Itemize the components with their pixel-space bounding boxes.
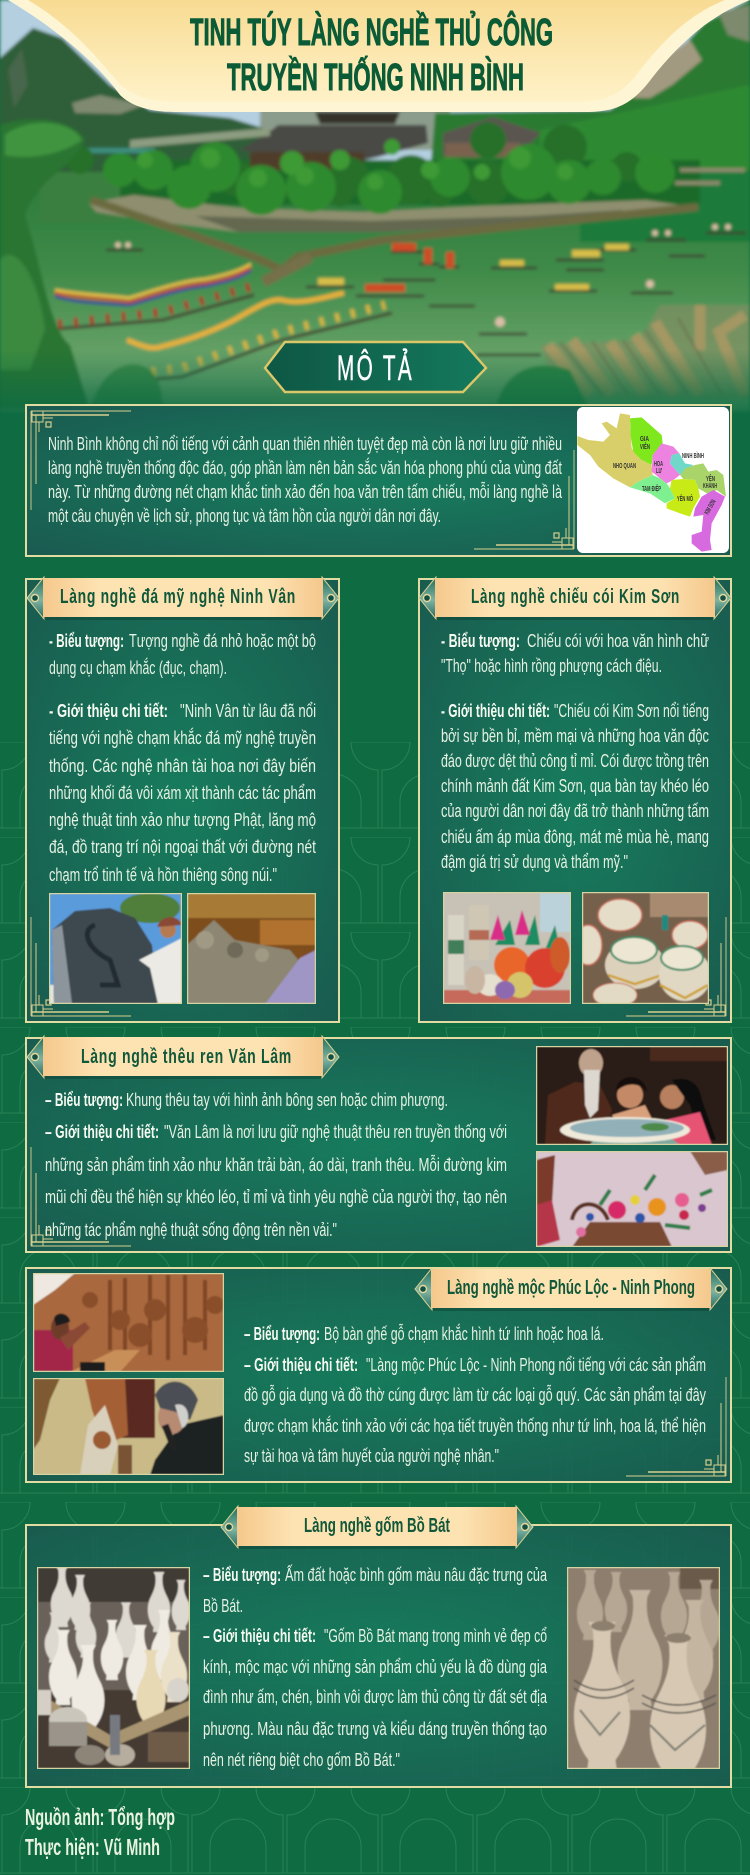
description text	[48, 434, 563, 526]
badge: Mô tả	[265, 342, 486, 392]
map of Ninh Binh: KHÁNH	[703, 481, 717, 490]
body text: nghệ thuật tinh xảo như tượng Phật, lăng mộ	[49, 810, 316, 830]
photo: elder teaching embroidery	[536, 1046, 728, 1145]
body text	[203, 1564, 548, 1770]
photo: painted brown vases	[567, 1567, 720, 1769]
body text: Ấm đất hoặc bình gốm màu nâu đặc trưng của	[285, 1564, 548, 1585]
body text: – Giới thiệu chi tiết:	[203, 1626, 316, 1646]
body text: đậm giá trị sử dụng và thẩm mỹ."	[441, 852, 628, 872]
footer credits: Thực hiện: Vũ Minh	[25, 1834, 160, 1860]
body text: những tác phẩm nghệ thuật sống động trên nền vải."	[45, 1220, 337, 1240]
corner ornament	[31, 917, 131, 1016]
badge: Mô tả: MÔ TẢ	[337, 348, 414, 388]
ribbon heading: Làng nghề đá mỹ nghệ Ninh Vân	[60, 586, 296, 608]
corner ornament bottom right	[474, 450, 574, 549]
body text: Bồ Bát.	[203, 1596, 243, 1616]
body text	[45, 1090, 507, 1240]
corner ornament	[31, 1147, 131, 1246]
panel: Van Lam embroidery	[26, 1036, 731, 1252]
body text: dụng cụ chạm khắc (đục, chạm).	[49, 657, 227, 678]
body text: những sản phẩm tinh xảo như khăn trải bàn, áo dài, tranh thêu. Mỗi đường kim	[45, 1154, 507, 1175]
body text: Tượng nghề đá nhỏ hoặc một bộ	[129, 631, 316, 651]
panel: Phuc Loc woodworking	[26, 1268, 731, 1482]
panel: Bo Bat ceramics	[26, 1506, 731, 1787]
hero fade to green	[0, 350, 750, 420]
photo: carved wood relief	[33, 1273, 224, 1372]
body text: "Ninh Vân từ lâu đã nổi	[180, 701, 316, 721]
body text	[49, 631, 316, 885]
body text: "Gốm Bồ Bát mang trong mình vẻ đẹp cổ	[324, 1626, 547, 1646]
ribbon heading: Làng nghề thêu ren Văn Lâm	[81, 1046, 292, 1068]
body text: mũi chỉ đều thể hiện sự khéo léo, tỉ mỉ và tình yêu nghề của người thợ, tạo nên	[45, 1187, 507, 1207]
ribbon heading	[419, 577, 731, 620]
ribbon heading: Làng nghề gốm Bồ Bát	[304, 1515, 450, 1537]
photo: stone stele carver	[49, 893, 182, 1004]
body text: thống. Các nghệ nhân tài hoa nơi đây biến	[49, 756, 316, 776]
photo: stone statues	[187, 893, 316, 1004]
body text: – Giới thiệu chi tiết:	[45, 1122, 159, 1142]
photo: embroidered flower basket	[536, 1151, 728, 1247]
map of Ninh Binh: LƯ	[656, 468, 662, 475]
photo: wood carver	[33, 1378, 224, 1475]
panel: description	[26, 405, 731, 556]
map of Ninh Binh: NHO QUAN	[613, 463, 636, 470]
corner ornament	[626, 1377, 726, 1476]
photo: woven baskets	[582, 892, 709, 1004]
body text: kính, mộc mạc với những sản phẩm chủ yếu là đồ dùng gia	[203, 1657, 548, 1677]
map of Ninh Binh: NINH BÌNH	[682, 451, 704, 460]
footer credits	[25, 1804, 175, 1860]
body text: đình như ấm, chén, bình vôi được làm thủ công từ đất sét địa	[203, 1687, 548, 1707]
map of Ninh Binh: VIỄN	[640, 442, 650, 451]
body text: - Giới thiệu chi tiết:	[49, 701, 168, 721]
map of Ninh Binh: GIA	[640, 436, 649, 443]
ribbon heading	[27, 577, 339, 620]
photo: woven vases	[443, 892, 571, 1004]
map of Ninh Binh: TAM ĐIỆP	[642, 484, 661, 493]
corner ornament top left	[31, 411, 131, 510]
ribbon heading	[27, 1036, 339, 1079]
footer credits: Nguồn ảnh: Tổng hợp	[25, 1804, 175, 1830]
map of Ninh Binh: KIM SƠN	[704, 499, 718, 516]
photo: white unglazed vases	[37, 1567, 190, 1769]
title banner	[8, 0, 750, 112]
corner ornament	[626, 917, 726, 1016]
body text: - Biểu tượng:	[441, 631, 520, 651]
hero photo: Tam Coc river landscape	[0, 0, 750, 412]
panel: Ninh Van stone carving	[26, 577, 339, 1022]
body text: tiếng với nghề chạm khắc đá mỹ nghệ truyền	[49, 727, 316, 748]
body text: chạm trổ tinh tế và hồn thiêng sông núi."	[49, 865, 277, 885]
body text: - Giới thiệu chi tiết:	[441, 701, 550, 721]
body text	[441, 631, 709, 872]
body text: - Biểu tượng:	[49, 631, 124, 651]
map of Ninh Binh: YÊN MÔ	[677, 494, 693, 503]
body text: Khung thêu tay với hình ảnh bông sen hoặc chim phượng.	[126, 1090, 448, 1110]
map of Ninh Binh: HOA	[654, 461, 663, 468]
body text: phương. Màu nâu đặc trưng và kiểu dáng truyền thống tạo	[203, 1719, 547, 1739]
map of Ninh Binh	[577, 407, 729, 553]
body text: – Giới thiệu chi tiết:	[244, 1355, 358, 1375]
map of Ninh Binh: YÊN	[706, 474, 715, 483]
body text: những khối đá vôi xám xịt thành các tác phẩm	[49, 783, 316, 803]
panel: Kim Son sedge mats	[419, 577, 731, 1022]
body text: sự tài hoa và tâm huyết của người nghệ nhân."	[244, 1446, 499, 1466]
body text: – Biểu tượng:	[244, 1324, 320, 1344]
title line 2: TRUYỀN THỐNG NINH BÌNH	[227, 54, 524, 99]
body text: "Văn Lâm là nơi lưu giữ nghệ thuật thêu ren truyền thống với	[164, 1122, 507, 1142]
body text	[244, 1323, 706, 1466]
background pattern band	[0, 742, 750, 1875]
body text: – Biểu tượng:	[203, 1565, 281, 1585]
description text: một câu chuyện về lịch sử, phong tục và tâm hồn của người dân nơi đây.	[48, 506, 441, 526]
body text: nên nét riêng biệt cho gốm Bồ Bát."	[203, 1750, 400, 1770]
ribbon heading	[415, 1268, 727, 1311]
body text: Bộ bàn ghế gỗ chạm khắc hình tứ linh hoặc hoa lá.	[324, 1323, 604, 1344]
body text: – Biểu tượng:	[45, 1090, 123, 1110]
ribbon heading	[221, 1506, 533, 1549]
body text: đá, đồ trang trí nội ngoại thất với đường nét	[49, 837, 316, 857]
